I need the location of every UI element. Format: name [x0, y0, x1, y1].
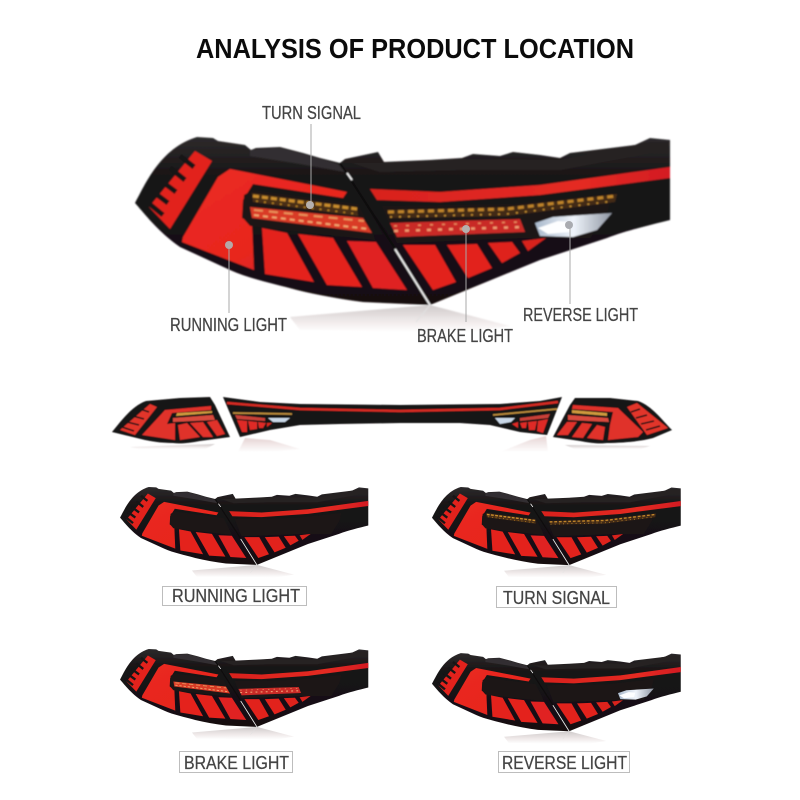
centre lamp: [223, 397, 562, 452]
title: ANALYSIS OF PRODUCT LOCATION: [196, 33, 634, 64]
callout: brake light: [417, 225, 513, 346]
callout: turn signal: [262, 103, 361, 209]
label: brake light: BRAKE LIGHT: [184, 753, 289, 773]
callout: running light: RUNNING LIGHT: [170, 315, 287, 335]
label: running light: RUNNING LIGHT: [172, 586, 300, 606]
variant: running light lit: [120, 487, 368, 577]
right lamp: [553, 398, 672, 449]
label: reverse light: REVERSE LIGHT: [502, 753, 627, 773]
label: turn signal: TURN SIGNAL: [503, 588, 610, 608]
variant: reverse light lit: [432, 653, 681, 744]
left lamp: [112, 397, 230, 449]
callout: reverse light: [523, 221, 638, 325]
variant: turn signal lit: [432, 487, 681, 578]
callout: running light: [170, 241, 287, 335]
callout: reverse light: REVERSE LIGHT: [523, 305, 638, 325]
full rear set: left, centre and right lamps: [112, 397, 672, 452]
variant: brake light lit: [120, 649, 368, 739]
callout: turn signal: TURN SIGNAL: [262, 103, 361, 123]
main tail light with all functions lit: [135, 137, 670, 332]
callout: brake light: BRAKE LIGHT: [417, 326, 513, 346]
